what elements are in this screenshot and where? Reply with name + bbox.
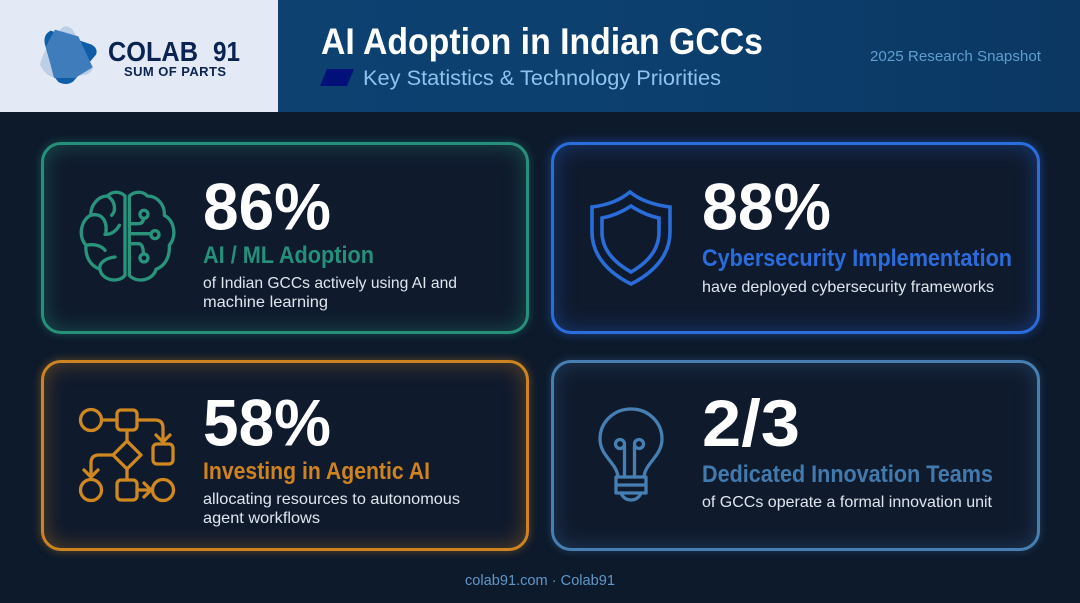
description: agent workflows [203, 510, 320, 527]
stat title: Investing in Agentic AI [203, 458, 430, 485]
icon: brain circuit [81, 192, 174, 280]
logo wordmark: 91 [213, 36, 240, 67]
panel: cybersecurity [551, 142, 1040, 334]
stat: 88% [702, 170, 831, 244]
description: machine learning [203, 294, 328, 311]
footer: colab91.com · Colab91 [465, 573, 615, 589]
subtitle: Key Statistics & Technology Priorities [363, 66, 721, 90]
description [203, 275, 457, 311]
title: AI Adoption in Indian GCCs [321, 21, 763, 62]
panel: agentic AI [41, 360, 529, 551]
stat: 58% [203, 386, 331, 460]
logo wordmark: COLAB [108, 36, 198, 67]
icon: workflow [80, 410, 174, 500]
subtitle marker [320, 69, 354, 86]
stat title: Dedicated Innovation Teams [702, 461, 993, 488]
icon: light bulb [600, 409, 662, 500]
logo panel [0, 0, 278, 112]
panel: AI / ML adoption [41, 142, 529, 334]
stat: 86% [203, 170, 331, 244]
description: of Indian GCCs actively using AI and [203, 275, 457, 292]
logo tagline: SUM OF PARTS [124, 64, 226, 79]
description [203, 491, 460, 527]
description: allocating resources to autonomous [203, 491, 460, 508]
icon: shield [592, 192, 670, 284]
header band [278, 0, 1080, 112]
panel: innovation teams [551, 360, 1040, 551]
description: of GCCs operate a formal innovation unit [702, 494, 993, 511]
logo mark [40, 26, 97, 84]
date label: 2025 Research Snapshot [870, 48, 1042, 65]
stat: 2/3 [702, 386, 800, 460]
stat title: Cybersecurity Implementation [702, 245, 1012, 272]
description: have deployed cybersecurity frameworks [702, 279, 994, 296]
stat title: AI / ML Adoption [203, 242, 374, 269]
